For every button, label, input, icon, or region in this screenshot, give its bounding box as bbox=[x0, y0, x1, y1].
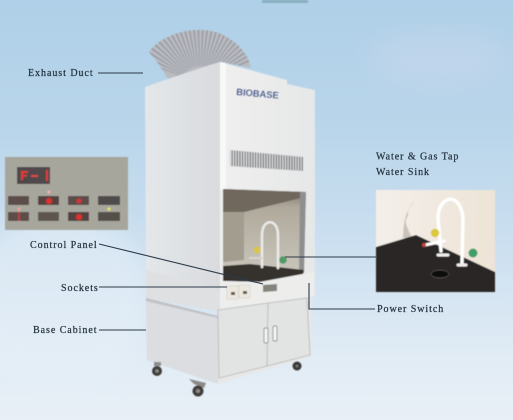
sink hole bbox=[431, 270, 449, 278]
line: control panel bbox=[99, 244, 263, 284]
label: sockets: Sockets bbox=[61, 283, 99, 294]
fume hood cabinet bbox=[145, 25, 315, 396]
line: exhaust duct bbox=[98, 72, 143, 74]
tap and sink photo inset bbox=[376, 190, 495, 292]
leader lines bbox=[98, 73, 376, 330]
label: water sink: Water Sink bbox=[376, 167, 430, 178]
base cabinet front bbox=[218, 297, 312, 384]
label: exhaust duct: Exhaust Duct bbox=[28, 68, 94, 79]
logo: BIOBASE bbox=[236, 87, 279, 102]
label: water and gas tap: Water & Gas Tap bbox=[376, 152, 459, 162]
line: base cabinet bbox=[99, 329, 146, 331]
lower front of hood bbox=[146, 270, 220, 312]
base cabinet side bbox=[146, 298, 218, 384]
tap bbox=[422, 199, 478, 265]
line: power switch bbox=[309, 283, 375, 309]
exhaust duct bbox=[148, 29, 251, 79]
line: tap bbox=[285, 256, 376, 258]
upper body side bbox=[145, 62, 220, 290]
small control display bbox=[263, 284, 277, 292]
label: power switch: Power Switch bbox=[377, 304, 444, 315]
labels bbox=[28, 68, 459, 336]
vent slots bbox=[230, 150, 303, 171]
casters bbox=[152, 362, 302, 396]
control panel inset bbox=[5, 157, 128, 230]
label: base cabinet: Base Cabinet bbox=[33, 325, 97, 336]
line: sockets bbox=[99, 286, 227, 288]
hood opening bbox=[223, 189, 306, 282]
door handles bbox=[264, 328, 268, 343]
buttons bbox=[8, 190, 120, 221]
work surface bbox=[223, 264, 304, 282]
label: control panel: Control Panel bbox=[30, 240, 98, 251]
faucet bbox=[250, 222, 287, 268]
sockets bbox=[227, 285, 250, 299]
upper body front bbox=[220, 62, 315, 312]
display bbox=[17, 167, 50, 184]
